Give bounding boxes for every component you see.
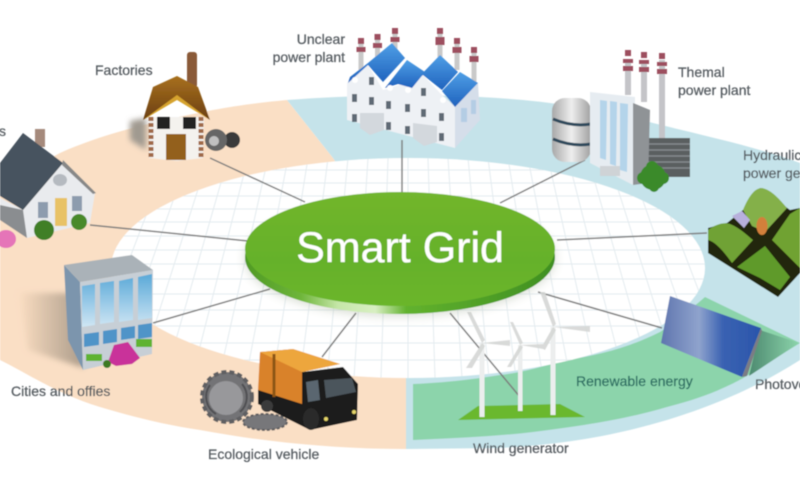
label: Unclear power plant: Unclear xyxy=(297,31,345,47)
label: Cities and offies: Cities and offies xyxy=(11,383,110,399)
label: Factories: Factories xyxy=(95,62,153,78)
icon: nuclear power plant xyxy=(347,28,480,148)
icon: house xyxy=(0,129,96,248)
label: Hydraulic power generation: Hydraulic xyxy=(743,147,800,163)
label: Themal power plant: Themal xyxy=(678,64,725,80)
panel: renewable energy sector (green band) xyxy=(413,297,800,440)
icon: solar panel xyxy=(661,296,799,377)
icon: wind turbines xyxy=(458,292,590,420)
label: Themal power plant: power plant xyxy=(678,82,750,98)
hub: Smart Grid green disc xyxy=(245,192,555,316)
panel: generation sector (blue ring) xyxy=(287,95,800,449)
label: Wind generator: Wind generator xyxy=(473,440,569,456)
icon: factory xyxy=(130,52,240,161)
icon: hydraulic power terrain xyxy=(708,188,800,297)
icon: thermal power plant xyxy=(552,50,690,192)
icon: truck with gears xyxy=(202,349,358,430)
label: Ecological vehicle: Ecological vehicle xyxy=(208,446,319,462)
panel: inner white grid ellipse xyxy=(112,158,706,378)
icon: office building xyxy=(20,255,153,370)
label: Renewable energy: Renewable energy xyxy=(576,373,693,389)
panel: consumption sector (peach ring) xyxy=(0,100,406,449)
title: Smart Grid: Smart Grid xyxy=(296,224,504,272)
label: Unclear power plant: power plant xyxy=(273,49,345,65)
connector lines from hub to each node xyxy=(90,140,707,397)
